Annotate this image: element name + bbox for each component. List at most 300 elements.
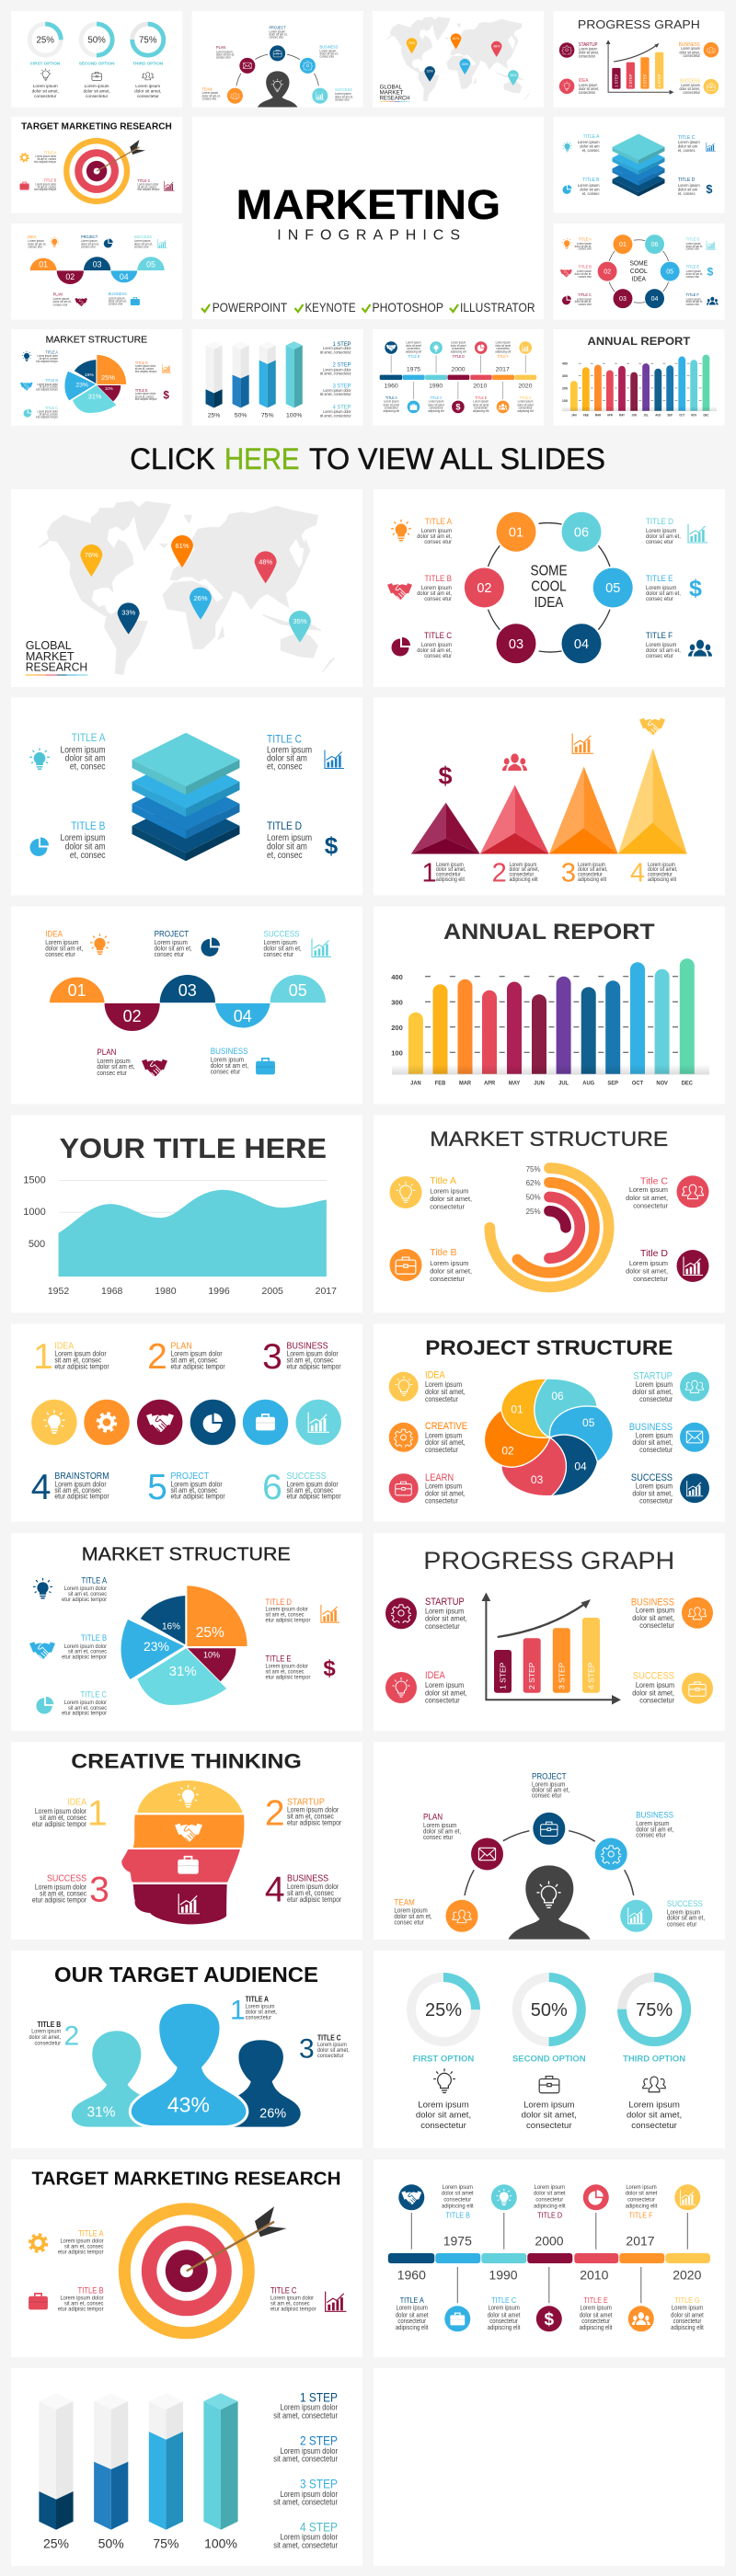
labels: dolor sit amet, bbox=[425, 1614, 467, 1623]
upper captions: Lorem ipsum bbox=[443, 2184, 473, 2191]
labels: TITLE B bbox=[78, 2285, 104, 2295]
numbered circles: 03 bbox=[509, 637, 523, 652]
thumbnail: cycle bbox=[554, 223, 724, 320]
circle icons bbox=[390, 1175, 708, 1282]
labels: dolor sit am et, bbox=[532, 1787, 569, 1793]
labels: Lorem ipsum bbox=[61, 745, 106, 755]
labels: Lorem ipsum bbox=[61, 833, 106, 842]
swirl petals bbox=[484, 1379, 613, 1496]
petal numbers: 04 bbox=[574, 1460, 587, 1473]
icons: $ bbox=[325, 831, 339, 859]
labels: LEARN bbox=[425, 1472, 454, 1483]
pyramid icons bbox=[438, 718, 665, 789]
numbered captions: 4 bbox=[630, 859, 645, 888]
upper captions: consectetur bbox=[443, 2196, 471, 2204]
axes bbox=[482, 1593, 621, 1705]
numbered labels: sit am et, consec bbox=[287, 1812, 334, 1821]
left labels: TITLE C bbox=[424, 630, 453, 640]
step labels: Lorem ipsum dolor bbox=[280, 2446, 338, 2456]
donut values: 75% bbox=[636, 2000, 673, 2021]
heading: global market research: RESEARCH bbox=[26, 660, 87, 674]
numbered labels: SUCCESS bbox=[47, 1873, 87, 1884]
labels: Lorem ipsum bbox=[394, 1907, 428, 1914]
labels: dolor sit am bbox=[65, 841, 106, 852]
lower captions: Lorem ipsum bbox=[672, 2305, 703, 2312]
slide: six circle cycle bbox=[374, 489, 725, 687]
labels: Lorem ipsum bbox=[667, 1909, 700, 1916]
numbered labels: 1 bbox=[33, 1337, 53, 1377]
labels: sit am et, consec bbox=[265, 1668, 304, 1676]
labels: sit am et, consec bbox=[68, 1591, 107, 1597]
silhouette bbox=[508, 1865, 591, 1940]
radial bars bbox=[489, 1168, 609, 1288]
heading: MARKETING: MARKETING bbox=[236, 181, 500, 228]
slide: wave steps bbox=[11, 907, 362, 1104]
labels: TITLE B bbox=[81, 1632, 107, 1643]
labels: consec etur bbox=[97, 1070, 128, 1077]
thumbnail: progress graph bbox=[554, 11, 724, 108]
labels: TITLE D bbox=[265, 1597, 292, 1607]
labels: Lorem ipsum bbox=[636, 1431, 673, 1440]
labels: dolor sit am bbox=[65, 753, 106, 763]
labels: sit am et, consec bbox=[265, 1611, 304, 1619]
labels: sit am et, consec bbox=[270, 2300, 310, 2307]
labels: dolor sit amet, bbox=[430, 1195, 472, 1203]
numbered labels: BRAINSTORM bbox=[54, 1471, 109, 1482]
lower captions: TITLE A bbox=[400, 2296, 424, 2305]
numbered labels: sit am et, consec bbox=[171, 1485, 218, 1494]
numbered labels: Lorem ipsum dolor bbox=[171, 1349, 223, 1358]
thumbnail: target research bbox=[11, 117, 182, 213]
heading: PROGRESS GRAPH bbox=[423, 1547, 674, 1574]
labels: consectetur bbox=[633, 1201, 669, 1210]
labels bbox=[58, 2228, 316, 2312]
timeline bar bbox=[388, 2253, 710, 2263]
y axis labels bbox=[23, 1175, 46, 1250]
labels: TITLE C bbox=[81, 1689, 107, 1700]
slide: stacked layers bbox=[11, 697, 362, 896]
software checklist: ILLUSTRATOR bbox=[460, 300, 535, 315]
subheading: INFOGRAPHICS: INFOGRAPHICS bbox=[277, 227, 460, 243]
upper captions: TITLE B bbox=[445, 2211, 470, 2220]
lower captions: dolor sit amet bbox=[671, 2312, 704, 2318]
labels: Lorem ipsum bbox=[636, 1482, 673, 1491]
numbered labels: PLAN bbox=[171, 1341, 192, 1352]
percent labels: 25% bbox=[526, 1208, 541, 1216]
numbered circles: 02 bbox=[477, 581, 491, 596]
numbered labels: TITLE B bbox=[37, 2020, 62, 2029]
step labels: Lorem ipsum dolor bbox=[280, 2403, 338, 2412]
month labels: JUN bbox=[534, 1080, 545, 1087]
labels: Lorem ipsum bbox=[636, 1380, 673, 1389]
labels: consectetur bbox=[639, 1696, 674, 1705]
numbered labels: 3 bbox=[89, 1870, 109, 1909]
pyramid chart bbox=[411, 749, 687, 853]
labels: etur adipisic tempor bbox=[62, 1597, 107, 1603]
labels: Title D bbox=[640, 1248, 668, 1259]
left labels: Lorem ipsum bbox=[421, 528, 452, 534]
arrow bbox=[187, 2206, 287, 2271]
bar graph: 2 STEP bbox=[527, 1662, 536, 1689]
pin labels: 35% bbox=[293, 617, 307, 625]
numbered captions: 2 bbox=[492, 859, 507, 888]
labels: dolor sit amet, bbox=[425, 1388, 466, 1396]
icons bbox=[29, 1578, 339, 1714]
numbered labels: etur adipisic tempor bbox=[287, 1818, 342, 1827]
labels: Lorem ipsum dolor bbox=[265, 1606, 308, 1612]
lower captions: TITLE E bbox=[583, 2296, 608, 2305]
upper captions: TITLE F bbox=[628, 2211, 653, 2220]
numbered labels: Lorem ipsum dolor bbox=[54, 1349, 107, 1358]
numbered captions: 1 bbox=[422, 859, 437, 888]
labels: TITLE E bbox=[265, 1654, 292, 1664]
captions: Lorem ipsum bbox=[523, 2101, 575, 2111]
labels: IDEA bbox=[425, 1670, 445, 1681]
pie labels: 25% bbox=[196, 1625, 224, 1641]
numbered circles: 05 bbox=[605, 581, 620, 596]
percent labels: 75% bbox=[526, 1165, 541, 1174]
left labels bbox=[417, 516, 453, 659]
labels: Lorem ipsum bbox=[267, 833, 312, 842]
option titles bbox=[413, 2054, 685, 2064]
circle icons bbox=[389, 1372, 709, 1503]
step labels: sit amet, consectetur bbox=[273, 2455, 338, 2463]
pie labels: 23% bbox=[144, 1639, 169, 1654]
upper captions: TITLE D bbox=[537, 2211, 562, 2220]
numbered labels: TITLE C bbox=[317, 2033, 341, 2042]
thumbnail: isometric bars bbox=[192, 329, 363, 426]
y axis labels: 400 bbox=[391, 973, 403, 981]
heading: CREATIVE THINKING bbox=[71, 1749, 302, 1772]
numbered labels: IDEA bbox=[54, 1341, 75, 1352]
numbered captions: consectetur bbox=[578, 872, 603, 878]
numbered labels: dolor sit amet, bbox=[29, 2035, 61, 2041]
lower captions: Lorem ipsum bbox=[397, 2305, 428, 2312]
heading: YOUR TITLE HERE bbox=[59, 1132, 327, 1164]
numbered labels: etur adipisic tempor bbox=[54, 1362, 109, 1371]
labels: Lorem ipsum bbox=[155, 939, 188, 946]
right labels: dolor sit am et, bbox=[646, 647, 681, 654]
captions: dolor sit amet, bbox=[416, 2111, 471, 2121]
month labels: DEC bbox=[682, 1080, 693, 1087]
labels: Lorem ipsum bbox=[532, 1781, 566, 1788]
numbered captions: consectetur bbox=[510, 872, 534, 878]
numbered captions: dolor sit amet, bbox=[648, 867, 678, 873]
numbered labels: BUSINESS bbox=[286, 1341, 328, 1352]
labels: consectetur bbox=[639, 1445, 673, 1454]
numbered labels: sit am et, consec bbox=[286, 1356, 334, 1365]
heading: global market research: MARKET bbox=[26, 649, 75, 663]
numbered labels: etur adipisic tempor bbox=[171, 1492, 225, 1501]
lower captions: Lorem ipsum bbox=[488, 2305, 520, 2312]
numbered labels: BUSINESS bbox=[287, 1873, 329, 1884]
step labels: 1 STEP bbox=[300, 2390, 338, 2405]
numbered labels: Lorem ipsum dolor bbox=[54, 1480, 107, 1489]
labels bbox=[425, 1370, 673, 1506]
labels: Lorem ipsum bbox=[430, 1186, 468, 1196]
numbered captions: Lorem ipsum bbox=[648, 862, 675, 868]
thumbnail: waves bbox=[11, 223, 182, 320]
labels: consectetur bbox=[430, 1275, 465, 1283]
labels: BUSINESS bbox=[629, 1423, 673, 1433]
slide: isometric bars bbox=[11, 2368, 362, 2566]
pie chart bbox=[121, 1586, 247, 1705]
bar graph bbox=[494, 1618, 600, 1693]
labels: TITLE C bbox=[267, 734, 302, 746]
option titles: THIRD OPTION bbox=[623, 2054, 685, 2064]
labels: dolor sit am bbox=[267, 841, 307, 852]
labels: TITLE B bbox=[71, 821, 105, 832]
upper captions bbox=[442, 2184, 658, 2220]
lower captions bbox=[396, 2296, 704, 2331]
upper captions: adipiscing elit bbox=[626, 2203, 658, 2210]
labels: Lorem ipsum bbox=[629, 1185, 668, 1194]
labels: dolor sit amet, bbox=[632, 1438, 673, 1447]
step labels bbox=[273, 2390, 338, 2550]
labels: Lorem ipsum bbox=[267, 745, 312, 755]
slide: timeline bbox=[374, 2159, 725, 2357]
numbered captions: adipiscing elit bbox=[578, 876, 606, 883]
lower captions: dolor sit amet bbox=[396, 2312, 429, 2318]
labels: Title C bbox=[640, 1175, 668, 1186]
thumbnail: timeline bbox=[373, 329, 544, 426]
numbered captions: dolor sit amet, bbox=[436, 867, 466, 873]
month labels: JAN bbox=[410, 1080, 421, 1087]
numbered labels: consectetur bbox=[35, 2041, 61, 2046]
captions: dolor sit amet, bbox=[522, 2111, 577, 2121]
percent labels: 50% bbox=[526, 1194, 541, 1201]
numbered captions: consectetur bbox=[648, 872, 673, 878]
numbered labels: dolor sit amet, bbox=[317, 2048, 350, 2054]
labels: etur adipisic tempor bbox=[58, 2306, 103, 2312]
numbered labels: 4 bbox=[31, 1468, 51, 1507]
pin labels: 33% bbox=[121, 609, 136, 616]
labels: dolor sit am et, bbox=[263, 945, 302, 953]
pie labels: 31% bbox=[169, 1664, 197, 1679]
circle icons bbox=[385, 1597, 713, 1704]
numbered labels: 2 bbox=[147, 1337, 167, 1377]
software checklist bbox=[201, 300, 535, 315]
labels: dolor sit amet, bbox=[430, 1267, 472, 1275]
right labels: dolor sit am et, bbox=[646, 533, 681, 540]
timeline icons bbox=[398, 2184, 700, 2331]
y axis labels: 300 bbox=[391, 999, 403, 1006]
numbered labels: etur adipisic tempor bbox=[286, 1362, 341, 1371]
month labels: OCT bbox=[632, 1080, 643, 1087]
percent labels: 100% bbox=[204, 2536, 237, 2551]
icons bbox=[29, 748, 344, 859]
numbered labels: dolor sit amet, bbox=[246, 2009, 278, 2015]
step labels: Lorem ipsum dolor bbox=[280, 2490, 338, 2499]
labels: consectetur bbox=[633, 1275, 669, 1283]
heading: click here: TO VIEW ALL SLIDES bbox=[309, 442, 605, 475]
year labels: 2020 bbox=[673, 2268, 702, 2283]
labels bbox=[430, 1175, 669, 1283]
labels: Lorem ipsum bbox=[211, 1057, 244, 1064]
step labels: sit amet, consectetur bbox=[273, 2411, 338, 2421]
y axis labels: 500 bbox=[29, 1239, 45, 1250]
panel: empty slide bbox=[374, 2368, 725, 2566]
labels: sit am et, consec bbox=[64, 2300, 103, 2307]
left labels: Lorem ipsum bbox=[421, 585, 452, 591]
numbered labels: IDEA bbox=[67, 1797, 87, 1808]
left labels: dolor sit am et, bbox=[417, 647, 452, 654]
numbered captions: Lorem ipsum bbox=[510, 862, 537, 868]
labels: dolor sit amet, bbox=[425, 1489, 466, 1498]
heading: TARGET MARKETING RESEARCH bbox=[31, 2170, 340, 2190]
numbered labels bbox=[31, 1337, 341, 1507]
labels: etur adipisic tempor bbox=[58, 2249, 103, 2255]
lower captions: dolor sit amet bbox=[580, 2312, 613, 2318]
labels: Title A bbox=[430, 1175, 456, 1186]
labels: Title B bbox=[430, 1247, 457, 1258]
pin labels: 61% bbox=[175, 542, 190, 550]
upper captions: Lorem ipsum bbox=[535, 2184, 565, 2191]
world map bbox=[39, 501, 335, 675]
numbered labels: etur adipisic tempor bbox=[286, 1492, 341, 1501]
slide: market structure pie bbox=[11, 1533, 362, 1731]
numbered circles: 04 bbox=[574, 637, 589, 652]
slide: percentage rings bbox=[374, 1951, 725, 2148]
captions bbox=[416, 2101, 682, 2131]
slide: world map bbox=[11, 489, 362, 687]
pin labels bbox=[85, 542, 307, 625]
lower captions: consectetur bbox=[673, 2318, 702, 2325]
numbered captions: dolor sit amet, bbox=[578, 867, 608, 873]
icons bbox=[387, 520, 712, 657]
heading: OUR TARGET AUDIENCE bbox=[54, 1963, 318, 1986]
y axis labels: 100 bbox=[391, 1048, 403, 1058]
numbered captions: adipiscing elit bbox=[510, 876, 538, 883]
left labels: dolor sit am et, bbox=[417, 590, 452, 597]
labels: Lorem ipsum dolor bbox=[60, 2238, 103, 2245]
center text: COOL bbox=[531, 579, 567, 595]
labels: dolor sit amet, bbox=[626, 1267, 668, 1275]
numbered labels: PROJECT bbox=[171, 1471, 209, 1482]
captions: Lorem ipsum bbox=[628, 2101, 680, 2111]
numbered labels: TITLE A bbox=[246, 1995, 270, 2004]
petal numbers: 01 bbox=[511, 1403, 523, 1416]
numbered labels: 1 bbox=[87, 1794, 108, 1834]
software checklist: KEYNOTE bbox=[305, 300, 355, 315]
labels: consectetur bbox=[425, 1394, 458, 1403]
pie labels bbox=[144, 1622, 224, 1679]
labels: Lorem ipsum bbox=[425, 1431, 462, 1440]
numbered labels: etur adipisic tempor bbox=[32, 1895, 87, 1905]
semicircle wave: 02 bbox=[123, 1007, 142, 1025]
numbered circles: 06 bbox=[574, 526, 589, 541]
labels: STARTUP bbox=[633, 1371, 673, 1382]
icon circles bbox=[31, 1400, 341, 1445]
left labels: dolor sit am et, bbox=[417, 533, 452, 540]
year labels: 1960 bbox=[397, 2268, 426, 2283]
labels: consec etur bbox=[423, 1835, 454, 1841]
slide: target marketing research bbox=[11, 2159, 362, 2357]
labels: SUCCESS bbox=[631, 1472, 673, 1483]
right labels: TITLE D bbox=[646, 516, 673, 526]
slide: project structure bbox=[374, 1324, 725, 1521]
year labels: 1990 bbox=[489, 2268, 518, 2283]
labels: consectetur bbox=[425, 1496, 458, 1506]
numbered labels: etur adipisic tempor bbox=[287, 1895, 342, 1904]
thumbnail: pie bbox=[11, 329, 182, 426]
pin labels: 48% bbox=[259, 557, 273, 567]
icons: $ bbox=[323, 1656, 336, 1681]
icons: $ bbox=[689, 576, 702, 601]
labels: etur adipisic tempor bbox=[62, 1654, 107, 1660]
labels: consec etur bbox=[636, 1832, 666, 1838]
x axis labels: 1952 bbox=[48, 1286, 69, 1297]
labels bbox=[61, 733, 312, 860]
year labels: 2010 bbox=[580, 2268, 609, 2283]
x axis labels bbox=[48, 1286, 337, 1297]
numbered labels: SUCCESS bbox=[286, 1471, 327, 1482]
step labels: 2 STEP bbox=[300, 2433, 338, 2448]
numbered labels bbox=[29, 1995, 350, 2065]
center text: IDEA bbox=[535, 595, 563, 611]
slide: progress graph bbox=[374, 1533, 725, 1731]
x axis labels: 1996 bbox=[208, 1286, 230, 1297]
labels: Lorem ipsum bbox=[425, 1607, 465, 1615]
labels: dolor sit am et, bbox=[97, 1064, 135, 1070]
numbered labels: 2 bbox=[265, 1794, 285, 1834]
option titles: SECOND OPTION bbox=[512, 2054, 586, 2064]
labels: Lorem ipsum bbox=[425, 1680, 465, 1689]
thumbnail: head arc bbox=[192, 11, 363, 108]
slide: area chart bbox=[11, 1115, 362, 1313]
year labels: 2000 bbox=[535, 2234, 564, 2249]
labels: BUSINESS bbox=[636, 1810, 673, 1820]
month labels: MAR bbox=[459, 1080, 472, 1087]
labels: Lorem ipsum bbox=[263, 939, 297, 946]
labels: consec etur bbox=[394, 1919, 425, 1927]
percent labels: 43% bbox=[167, 2093, 210, 2117]
labels: Lorem ipsum bbox=[45, 939, 79, 946]
month labels: AUG bbox=[582, 1080, 594, 1087]
thumbnail: percentage rings bbox=[11, 11, 182, 108]
y axis labels bbox=[391, 973, 403, 1058]
numbered labels: 3 bbox=[299, 2034, 315, 2065]
labels: dolor sit amet, bbox=[632, 1388, 673, 1396]
captions: consectetur bbox=[631, 2121, 678, 2131]
x axis labels: 2017 bbox=[316, 1286, 337, 1297]
labels: Lorem ipsum dolor bbox=[64, 1643, 107, 1650]
numbered labels: etur adipisic tempor bbox=[54, 1492, 109, 1501]
labels: et, consec bbox=[267, 850, 303, 860]
labels: TITLE A bbox=[78, 2228, 104, 2238]
numbered labels: Lorem ipsum dolor bbox=[286, 1480, 339, 1489]
upper captions: adipiscing elit bbox=[534, 2203, 566, 2210]
software checklist: PHOTOSHOP bbox=[372, 300, 443, 315]
petal numbers: 03 bbox=[531, 1473, 544, 1486]
y axis labels: 1000 bbox=[23, 1207, 46, 1218]
labels: TITLE D bbox=[267, 821, 302, 832]
labels: BUSINESS bbox=[631, 1597, 674, 1609]
labels: consec etur bbox=[45, 952, 75, 958]
numbered captions: 3 bbox=[561, 859, 576, 888]
percent labels bbox=[526, 1165, 541, 1216]
labels: dolor sit amet, bbox=[632, 1689, 674, 1697]
bar graph: 3 STEP bbox=[557, 1662, 566, 1689]
right labels bbox=[646, 516, 681, 659]
labels: BUSINESS bbox=[211, 1047, 248, 1056]
numbered labels: sit am et, consec bbox=[54, 1356, 102, 1365]
software checklist: POWERPOINT bbox=[213, 300, 288, 315]
numbered labels: 3 bbox=[262, 1337, 282, 1377]
labels: dolor sit am et, bbox=[423, 1828, 461, 1835]
lower captions: Lorem ipsum bbox=[580, 2305, 612, 2312]
numbered captions: Lorem ipsum bbox=[578, 862, 605, 868]
